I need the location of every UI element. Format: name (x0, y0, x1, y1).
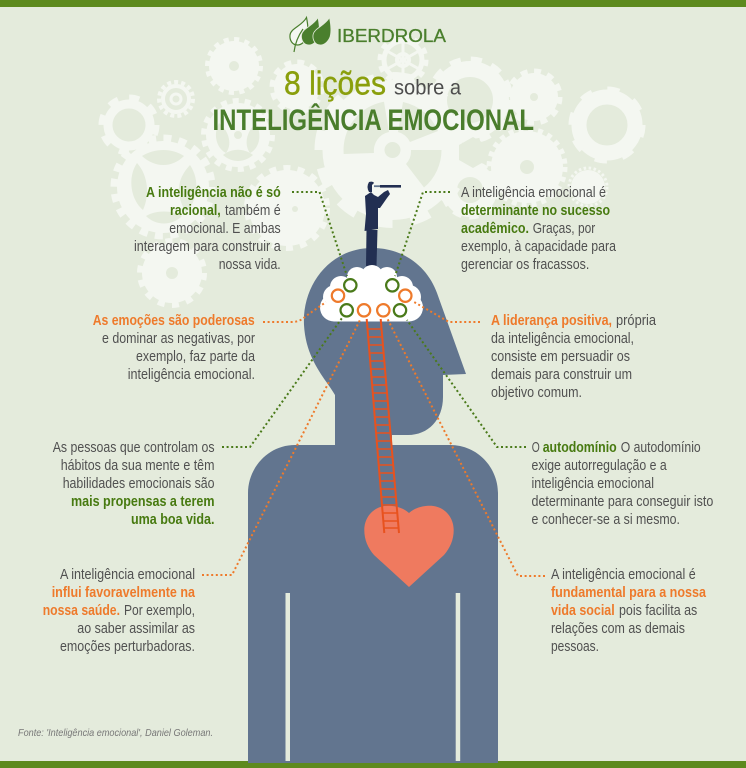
text: academic success (461, 185, 617, 273)
text: rational and emotional: interagem para construir a (134, 239, 281, 255)
logo wordmark: IBERDROLA (337, 25, 447, 46)
title (212, 64, 534, 137)
text: health: nossa saúde. (43, 603, 120, 619)
thought cloud (320, 265, 423, 322)
text: positive leadership: objetivo comum. (491, 385, 582, 401)
text: positive leadership: consiste em persuadir os (491, 349, 630, 365)
text: social life: pois facilita as (619, 603, 697, 619)
connector: self-control (407, 320, 526, 447)
text: academic success: A inteligência emocional é (461, 185, 606, 201)
text: health: influi favoravelmente na (52, 585, 196, 601)
text: good life: habilidades emocionais são (63, 476, 215, 492)
heart (364, 506, 454, 587)
bottom bar (0, 761, 746, 768)
text: rational and emotional: racional, (170, 203, 221, 219)
icon: leaves (290, 18, 331, 52)
text: academic success: determinante no sucesso (461, 203, 610, 219)
arm gaps (286, 593, 460, 761)
text: positive leadership: própria (616, 313, 657, 329)
text: social life: relações com as demais (551, 621, 685, 637)
man with telescope (364, 182, 401, 266)
text: academic success: gerenciar os fracassos. (461, 257, 589, 273)
text: self-control: exige autorregulação e a (532, 458, 667, 474)
text: academic success: Graças, por (533, 221, 595, 237)
connector: social life (387, 318, 545, 576)
connector: emotions (263, 302, 326, 322)
title: INTELIGÊNCIA EMOCIONAL (212, 103, 534, 137)
text: good life: uma boa vida. (131, 512, 214, 528)
ladder (367, 319, 399, 533)
text: powerful emotions: inteligência emocional. (128, 367, 255, 383)
text: self-control: O autodomínio (621, 440, 701, 456)
top bar (0, 0, 746, 7)
source note: Fonte: 'Inteligência emocional', Daniel Goleman. (18, 727, 213, 739)
text: academic success: acadêmico. (461, 221, 529, 237)
text: social life: vida social (551, 603, 615, 619)
text: rational and emotional: A inteligência não é só (146, 185, 281, 201)
logo: Iberdrola (290, 18, 447, 52)
text: health: A inteligência emocional (60, 567, 195, 583)
text: social life: pessoas. (551, 639, 599, 655)
text: powerful emotions: As emoções são poderosas (93, 313, 255, 329)
text: health: Por exemplo, (124, 603, 195, 619)
text: rational and emotional: também é (225, 203, 281, 219)
connector: top right (395, 192, 450, 276)
text: positive leadership: A liderança positiva, (491, 313, 612, 329)
text: positive leadership: demais para construir um (491, 367, 632, 383)
human silhouette (248, 248, 498, 763)
text: social life: fundamental para a nossa (551, 585, 707, 601)
connector: good life (222, 318, 342, 447)
text: self-control: autodomínio (543, 440, 617, 456)
background gears (102, 37, 642, 305)
text: rational and emotional: nossa vida. (219, 257, 281, 273)
text: academic success: exemplo, à capacidade para (461, 239, 617, 255)
text: self-control: determinante para conseguir isto (532, 494, 713, 510)
text: health (43, 567, 196, 655)
text: health: ao saber assimilar as (77, 621, 195, 637)
text: powerful emotions: exemplo, faz parte da (136, 349, 256, 365)
brain nodes (332, 279, 411, 316)
text: self-control: e conhecer-se a si mesmo. (532, 512, 680, 528)
title: 8 lições (284, 64, 386, 102)
text: rational and emotional (134, 185, 281, 273)
connector: top left (292, 192, 347, 276)
text: social life (551, 567, 707, 655)
text: good life: mais propensas a terem (71, 494, 215, 510)
text: powerful emotions: e dominar as negativas, por (102, 331, 255, 347)
text: positive leadership: da inteligência emocional, (491, 331, 634, 347)
text: self-control: inteligência emocional (532, 476, 654, 492)
text: positive leadership (491, 313, 657, 401)
connector: leadership (414, 302, 480, 322)
text: self-control (532, 440, 713, 528)
text: good life (53, 440, 215, 528)
text: self-control: O (532, 440, 540, 456)
connector: health (202, 320, 360, 575)
text: good life: As pessoas que controlam os (53, 440, 215, 456)
text: rational and emotional: emocional. E ambas (169, 221, 281, 237)
text: health: emoções perturbadoras. (60, 639, 195, 655)
text: good life: hábitos da sua mente e têm (61, 458, 215, 474)
text: powerful emotions (93, 313, 256, 383)
title: sobre a (394, 76, 461, 100)
text: social life: A inteligência emocional é (551, 567, 696, 583)
